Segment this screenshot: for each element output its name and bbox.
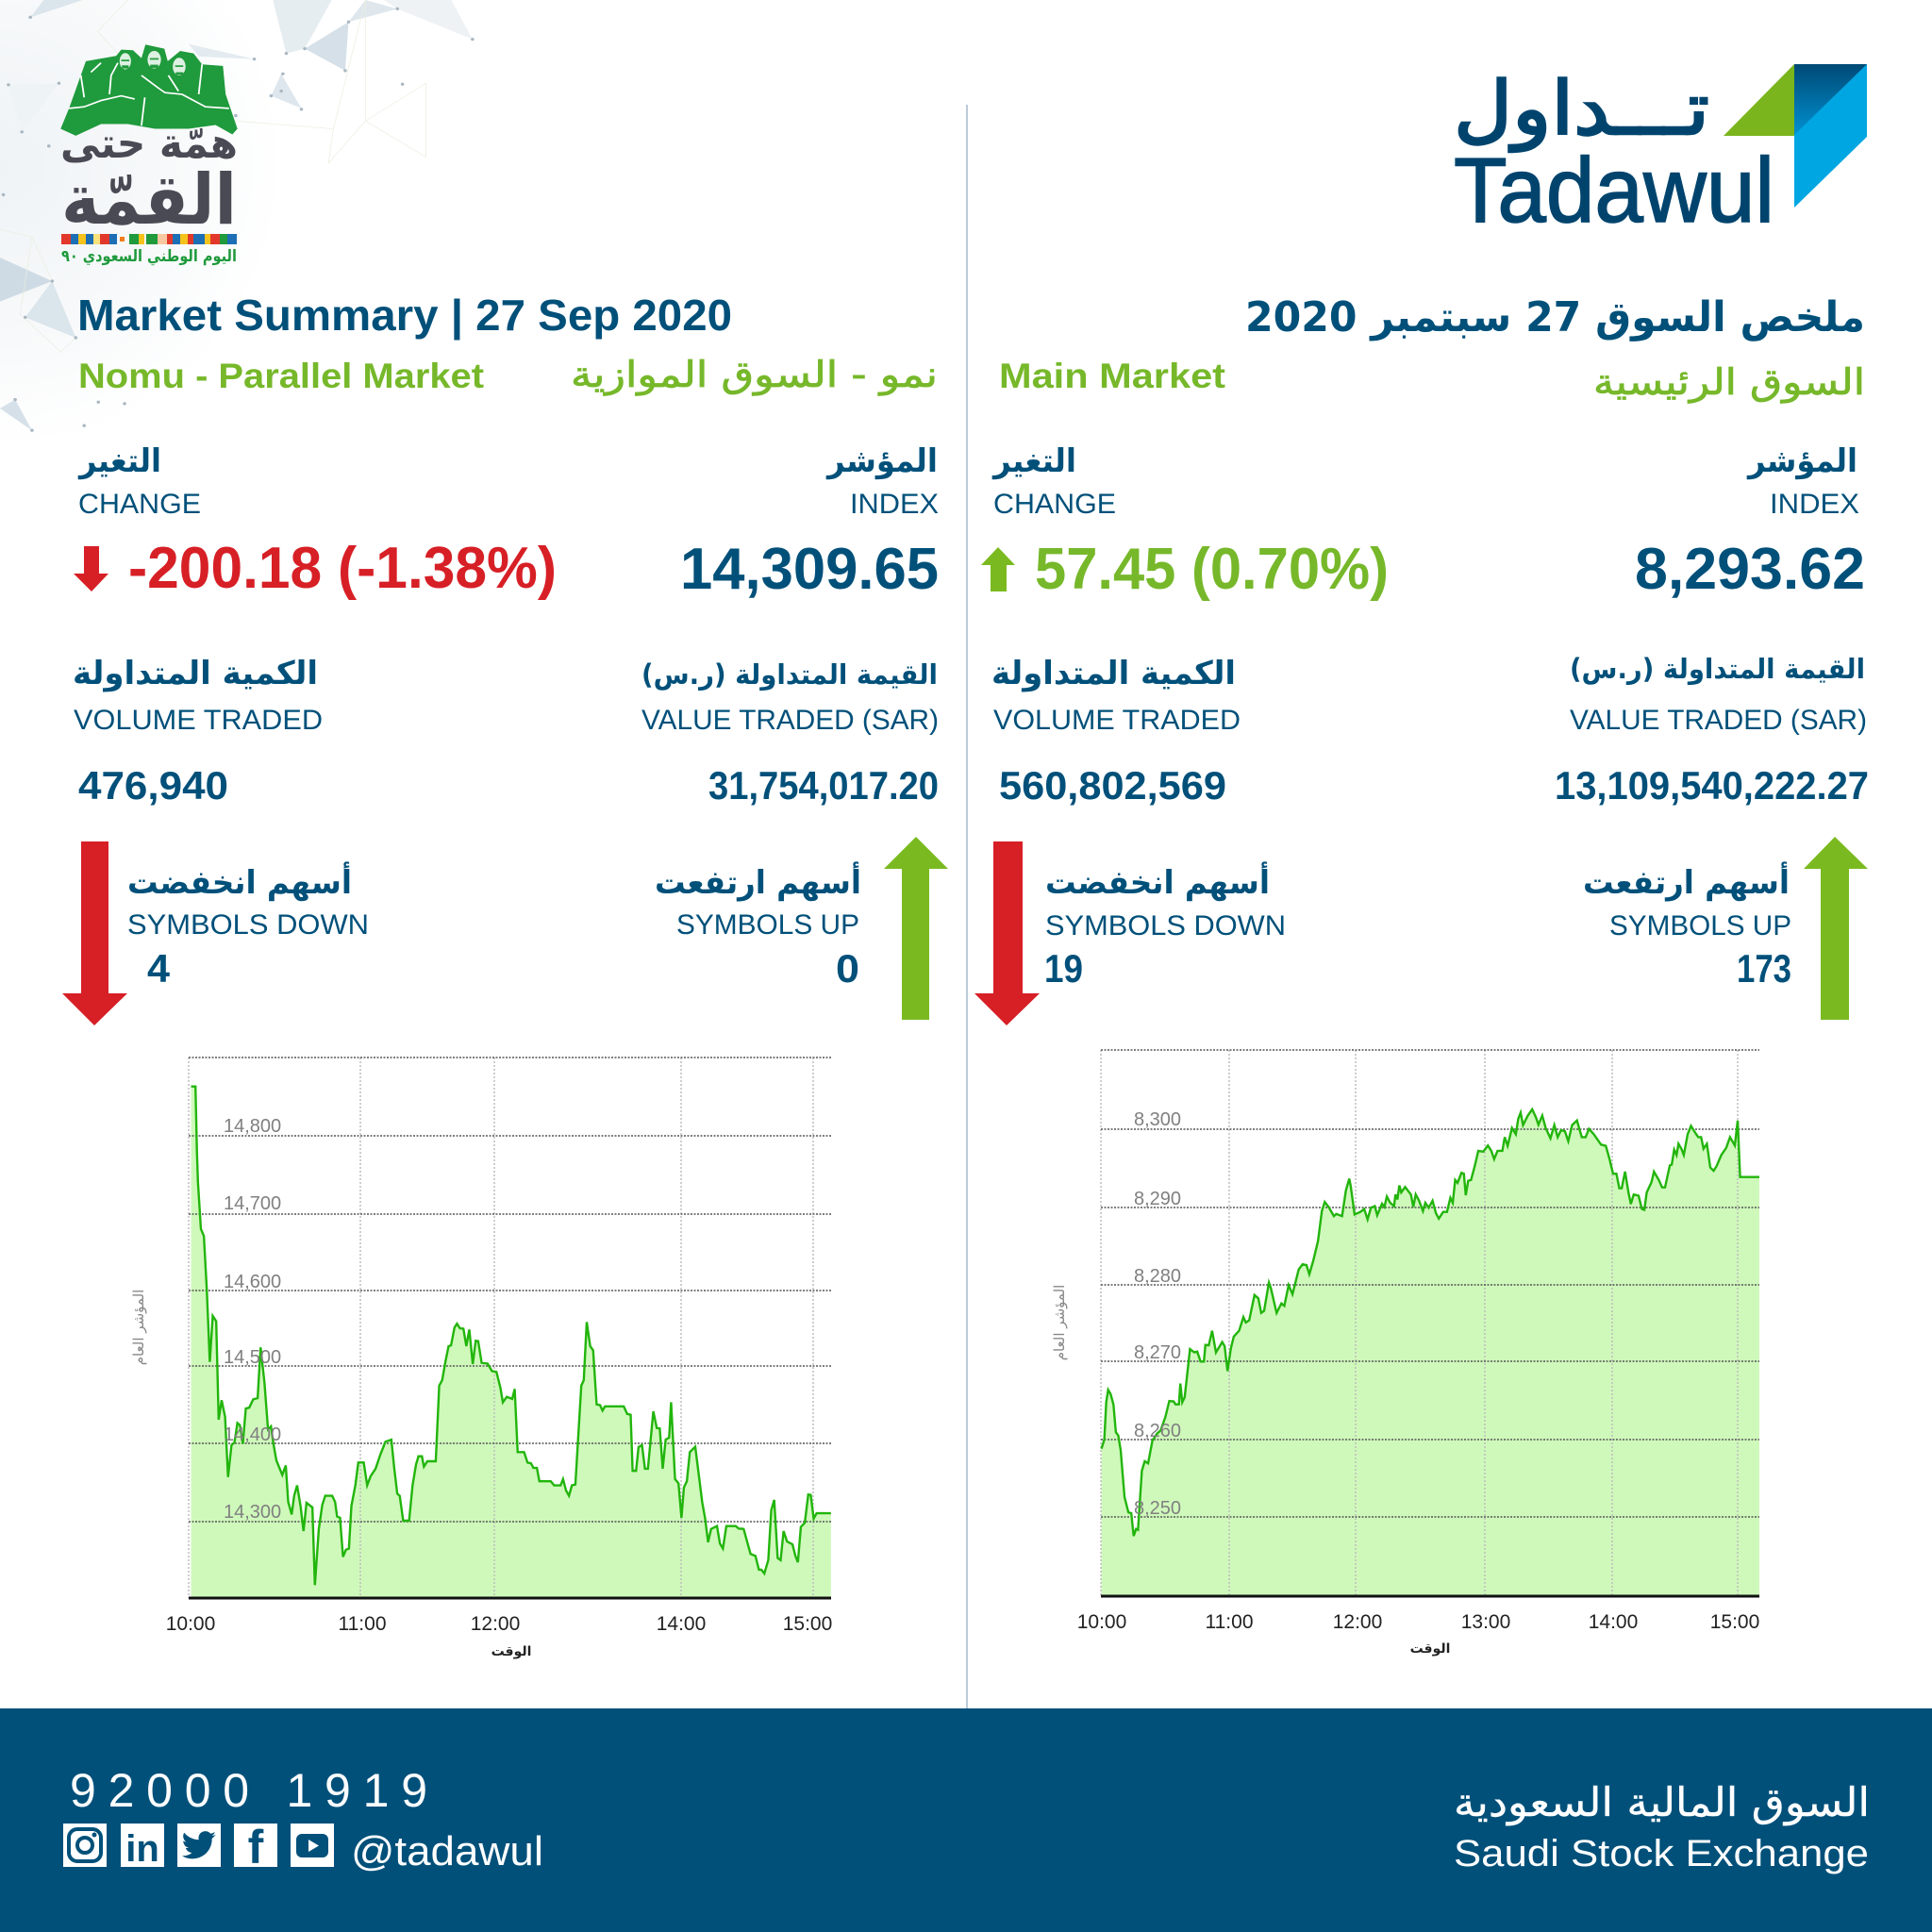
icon: youtube: [291, 1824, 334, 1867]
line chart: main index: [1051, 1050, 1759, 1657]
panel: main market: [974, 293, 1869, 1657]
value: change: -200.18 (-1.38%): [128, 536, 557, 601]
line chart: main index: 8,290: [1134, 1189, 1181, 1209]
label: symbols up: SYMBOLS UP: [1609, 910, 1791, 941]
line chart: Nomu index: [130, 1058, 832, 1659]
panel: Nomu parallel market: [62, 291, 948, 1659]
icon: small red down arrow: [74, 546, 108, 591]
social handle: @tadawul: [351, 1828, 543, 1874]
line chart: Nomu index: 14,300: [224, 1502, 281, 1523]
value: volume: 476,940: [78, 763, 228, 808]
arrow: symbols up: [1804, 837, 1868, 1020]
label: symbols down Arabic: أسهم انخفضت: [127, 861, 352, 902]
label: index: INDEX: [1770, 489, 1859, 520]
value: traded value: 31,754,017.20: [708, 763, 939, 808]
label: index Arabic: المؤشر: [1746, 442, 1857, 480]
line chart: main index: 8,280: [1134, 1266, 1181, 1287]
subtitle: main market Arabic: السوق الرئيسية: [1593, 361, 1865, 404]
label: volume Arabic: الكمية المتداولة: [991, 655, 1236, 692]
subtitle: Nomu: Nomu - Parallel Market: [78, 357, 484, 395]
line chart: main index: 8,270: [1134, 1342, 1181, 1363]
line chart: Nomu index: 14,600: [224, 1272, 281, 1292]
label: symbols down: SYMBOLS DOWN: [127, 909, 369, 941]
subtitle: Nomu Arabic: نمو - السوق الموازية: [571, 354, 938, 396]
line chart: main index: 15:00: [1710, 1611, 1759, 1633]
line chart: Nomu index: 10:00: [166, 1613, 215, 1635]
line chart: Nomu index: الوقت: [491, 1644, 531, 1659]
line chart: Nomu index: 14,700: [224, 1193, 281, 1214]
line chart: Nomu index: 11:00: [338, 1613, 387, 1635]
logo: Tadawul: [1454, 64, 1867, 242]
label: volume traded: VOLUME TRADED: [74, 705, 323, 736]
icon: twitter: [177, 1824, 221, 1867]
arrow: symbols up: [884, 837, 948, 1020]
icon: facebook: [234, 1821, 277, 1874]
logo: national day campaign: [60, 44, 238, 266]
title: market summary: Market Summary | 27 Sep 2020: [77, 291, 732, 340]
line chart: Nomu index: 12:00: [471, 1613, 520, 1635]
icon: linkedin: [121, 1824, 164, 1870]
value: index: 14,309.65: [680, 537, 939, 602]
icon: linkedin: in: [125, 1828, 159, 1870]
icon: Tadawul mark: [1724, 64, 1867, 208]
subtitle: main market: Main Market: [999, 357, 1225, 395]
value: symbols up: 0: [836, 946, 859, 991]
label: symbols up Arabic: أسهم ارتفعت: [1583, 861, 1790, 902]
logo Latin wordmark: Tadawul: [1454, 139, 1774, 242]
colored pattern strip: [61, 234, 237, 244]
line chart: main index: المؤشر العام: [1051, 1285, 1068, 1360]
label: symbols up: SYMBOLS UP: [676, 909, 859, 941]
line chart: Nomu index: 14:00: [657, 1613, 706, 1635]
label: value Arabic: القيمة المتداولة (ر.س): [1570, 653, 1865, 685]
campaign caption: اليوم الوطني السعودي ٩٠: [61, 247, 237, 266]
exchange name: Saudi Stock Exchange: [1454, 1833, 1869, 1874]
footer band: [0, 1708, 1932, 1932]
line chart: main index: 8,250: [1134, 1498, 1181, 1519]
slogan line 1: همّة حتى: [60, 120, 238, 168]
line chart: main index: الوقت: [1410, 1641, 1450, 1657]
line chart: Nomu index: 14,400: [224, 1424, 281, 1445]
logo Arabic wordmark: تـــداول: [1454, 67, 1709, 153]
line chart: main index: 12:00: [1333, 1611, 1382, 1633]
label: volume traded: VOLUME TRADED: [993, 705, 1241, 736]
label: symbols down: SYMBOLS DOWN: [1045, 910, 1286, 941]
icon: green mountain with figures: [60, 44, 238, 136]
value: symbols up: 173: [1737, 946, 1791, 991]
line chart: Nomu index: 14,800: [224, 1116, 281, 1137]
line chart: main index: 8,300: [1134, 1109, 1181, 1130]
value: traded value: 13,109,540,222.27: [1555, 763, 1869, 808]
line chart: main index: 10:00: [1077, 1611, 1126, 1633]
icon: instagram: [63, 1824, 107, 1867]
label: index: INDEX: [850, 489, 939, 520]
label: symbols up Arabic: أسهم ارتفعت: [655, 861, 861, 902]
phone number: 92000 1919: [70, 1764, 427, 1817]
icon: small green up arrow: [981, 547, 1015, 591]
arrow: symbols down: [62, 841, 127, 1025]
label: change: CHANGE: [78, 489, 201, 520]
label: volume Arabic: الكمية المتداولة: [73, 655, 318, 692]
exchange name Arabic: السوق المالية السعودية: [1454, 1779, 1870, 1825]
line chart: Nomu index: المؤشر العام: [130, 1290, 147, 1365]
line chart: Nomu index: 14,500: [224, 1347, 281, 1368]
value: volume: 560,802,569: [999, 763, 1226, 808]
slogan line 2: القمّة: [61, 159, 237, 241]
label: change: CHANGE: [993, 489, 1116, 520]
center divider: [966, 105, 968, 1709]
decorative network background: [0, 0, 475, 472]
value: change: 57.45 (0.70%): [1035, 537, 1389, 602]
icon: facebook: f: [248, 1821, 264, 1874]
label: change Arabic: التغير: [991, 442, 1076, 480]
title: Arabic market summary: ملخص السوق 27 سبتمبر 2020: [1245, 293, 1865, 341]
label: value traded: VALUE TRADED (SAR): [1570, 705, 1867, 736]
value: symbols down: 4: [147, 946, 171, 991]
label: index Arabic: المؤشر: [825, 442, 938, 480]
line chart: Nomu index: 15:00: [783, 1613, 832, 1635]
line chart: main index: 11:00: [1206, 1611, 1253, 1633]
line chart: main index: 8,260: [1134, 1421, 1181, 1441]
label: symbols down Arabic: أسهم انخفضت: [1045, 861, 1270, 902]
value: symbols down: 19: [1044, 946, 1083, 991]
label: change Arabic: التغير: [77, 442, 161, 480]
label: value traded: VALUE TRADED (SAR): [641, 705, 939, 736]
line chart: main index: 14:00: [1589, 1611, 1638, 1633]
value: index: 8,293.62: [1635, 537, 1865, 602]
label: value Arabic: القيمة المتداولة (ر.س): [641, 658, 938, 691]
arrow: symbols down: [974, 841, 1040, 1025]
line chart: main index: 13:00: [1461, 1611, 1510, 1633]
